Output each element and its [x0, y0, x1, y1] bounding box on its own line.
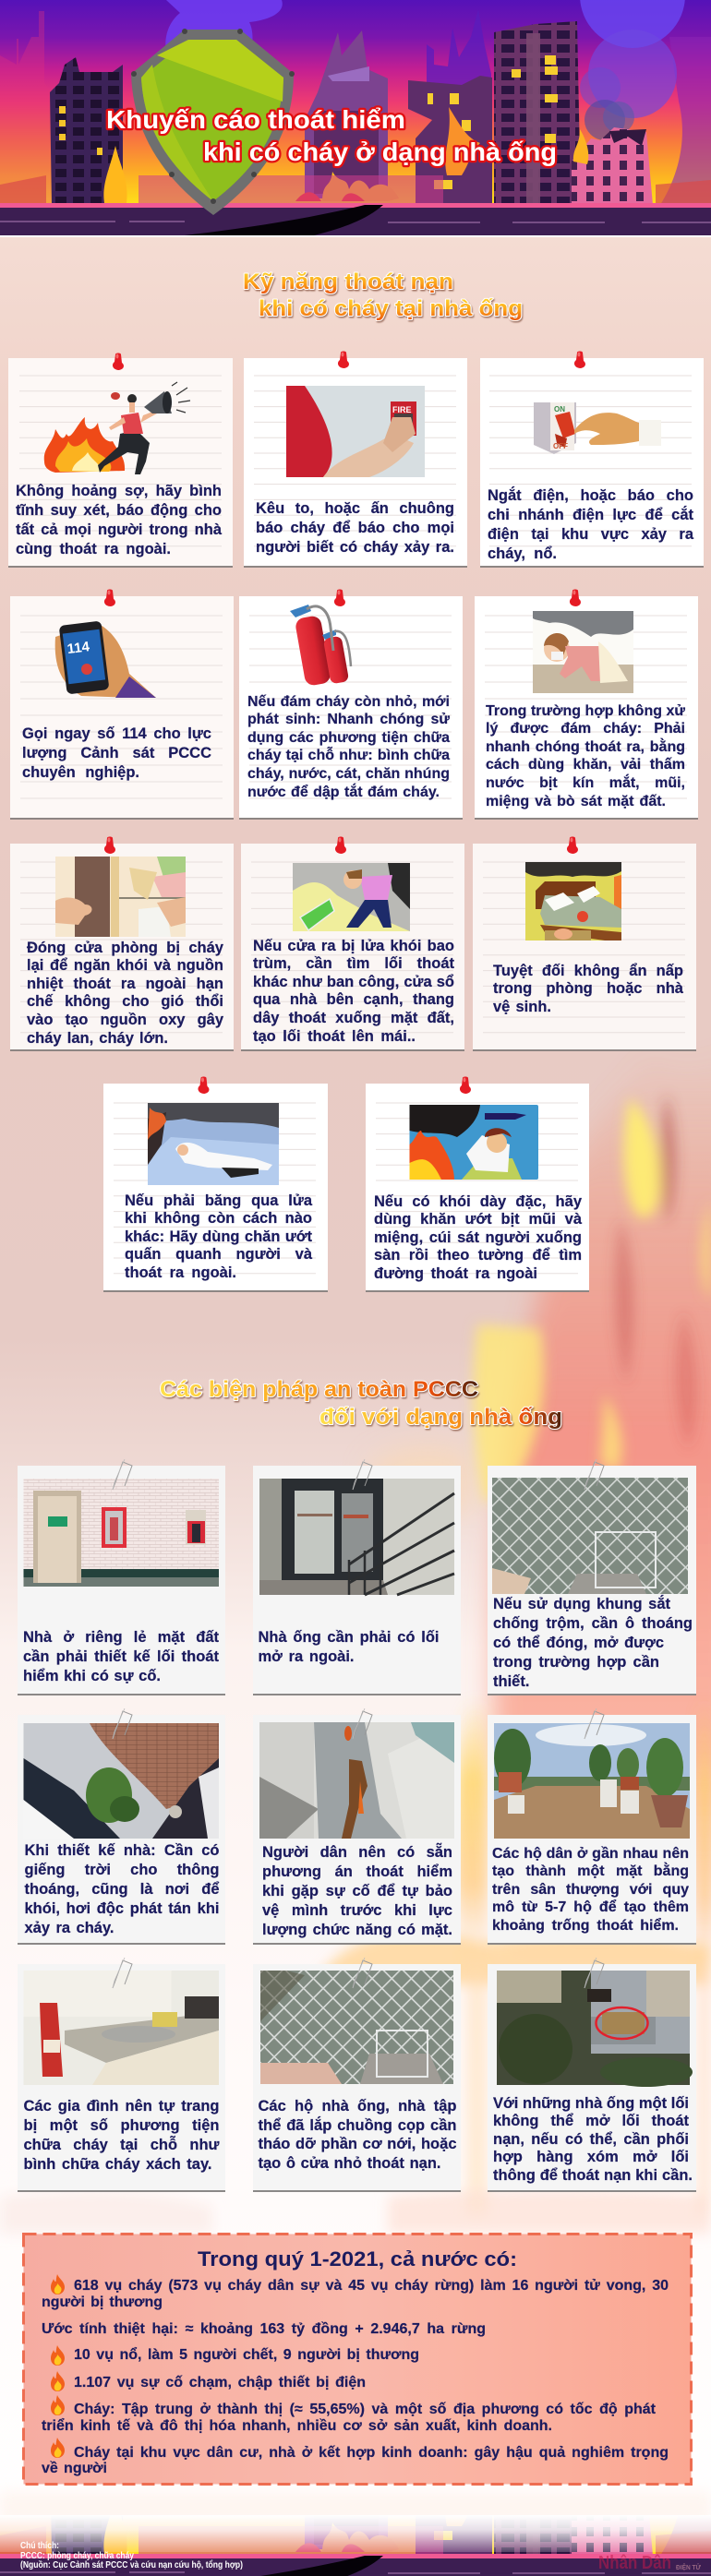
text	[486, 702, 685, 811]
text: phát sinh: Nhanh chóng sử	[247, 712, 450, 727]
icon: pin	[198, 1076, 209, 1094]
stats text: người bị thương	[42, 2294, 163, 2310]
text: quấn quanh người và	[125, 1246, 312, 1263]
photo: pressing fire alarm	[286, 386, 425, 477]
panel: security frames	[488, 1459, 696, 1695]
panel: crawl out	[475, 589, 698, 820]
text: hợp hàng xóm mở lối	[493, 2149, 689, 2165]
text: cháy lan, cháy lớn.	[27, 1030, 168, 1047]
text: điện tại khu vực xảy ra	[488, 526, 693, 543]
text: khi gặp sự cố để tự bảo	[262, 1883, 452, 1899]
text: Nhà ống cần phải có lối	[259, 1629, 440, 1646]
text: cách dùng khăn, vải thấm	[486, 757, 685, 773]
panel: sound the alarm	[244, 351, 467, 568]
text: nước bịt kín mắt, mũi,	[486, 775, 685, 791]
footer notes: PCCC: phòng cháy, chữa cháy	[20, 2551, 134, 2561]
text	[253, 938, 454, 1047]
text: lượng chức năng có mặt.	[262, 1922, 452, 1938]
stats text: Cháy: Tập trung ở thành thị (≈ 55,65%) và một số địa phương có tốc độ phát	[74, 2402, 656, 2417]
text: khói, hơi độc phát tán khi	[24, 1900, 220, 1917]
stats text: Ước tính thiệt hại: ≈ khoảng 163 tỷ đồng + 2.946,7 ha rừng	[42, 2321, 486, 2337]
text: vệ sinh.	[493, 999, 551, 1015]
stats text: Cháy tại khu vực dân cư, nhà ở kết hợp kinh doanh: gây hậu quả nghiêm trọng	[74, 2445, 669, 2461]
text	[24, 1841, 220, 1941]
text	[488, 486, 693, 568]
panel: Q1 2021 statistics	[24, 2234, 691, 2487]
text: không thể mở lối thoát	[493, 2113, 689, 2129]
text: khác: Hãy dùng chăn ướt	[125, 1228, 312, 1245]
text: người biết có cháy xảy ra.	[256, 539, 454, 556]
text	[259, 2097, 456, 2180]
stats text: triển kinh tế và đô thị hóa nhanh, nhiều cơ sở sản xuất, kinh doanh.	[42, 2418, 552, 2434]
text: Các gia đình nên tự trang	[24, 2098, 220, 2115]
text: thiết.	[493, 1673, 529, 1690]
text: Các hộ dân ở gần nhau nên	[492, 1846, 689, 1862]
text	[262, 1843, 452, 1943]
text: cháy, nước, cát, chăn nhúng	[247, 766, 450, 782]
icon: pin	[104, 836, 115, 854]
panel: crossing fire	[103, 1076, 328, 1292]
text: chống trộm, cần ô thoáng	[493, 1615, 693, 1632]
photo: exit door, extinguisher cabinet, phone	[24, 1479, 219, 1587]
icon: flame	[51, 2345, 65, 2366]
text: tháo dỡ phần cơ nới, hoặc	[259, 2136, 456, 2152]
illustration: person following exit sign	[293, 863, 410, 931]
text: trong phòng hoặc nhà	[493, 980, 683, 997]
text: lý được đám cháy: Phải	[486, 721, 685, 737]
icon: flame	[51, 2438, 65, 2458]
text: Nếu phải băng qua lửa	[125, 1192, 312, 1209]
footer notes	[20, 2541, 243, 2570]
panel: call 114	[10, 589, 234, 820]
icon: paperclip	[584, 1708, 604, 1739]
stats text: 1.107 vụ sự cố chạm, chập thiết bị điện	[74, 2375, 366, 2390]
heading: safety measures: đối với dạng nhà ống	[319, 1405, 562, 1430]
text: miệng và bò sát mặt đất.	[486, 794, 666, 809]
panel: shared exit with neighbours	[488, 1958, 696, 2192]
text: hiểm khi có sự cố.	[23, 1668, 161, 1684]
text: thoát ra ngoài.	[125, 1264, 236, 1281]
text	[493, 1595, 693, 1695]
text: Nếu có khói dày đặc, hãy	[374, 1193, 582, 1210]
text: Tuyệt đối không ẩn nấp	[493, 963, 683, 979]
icon: pin	[113, 353, 124, 370]
stats title: Trong quý 1-2021, cả nước có:	[198, 2247, 517, 2270]
icon: paperclip	[584, 1459, 604, 1490]
panel: do not hide	[473, 836, 696, 1051]
text: báo cháy để báo cho mọi	[256, 520, 454, 536]
panel: outward exit	[253, 1459, 461, 1695]
text: chữa cháy tại chỗ như	[24, 2137, 220, 2153]
text	[125, 1192, 312, 1285]
photo: person rappelling a building	[259, 1722, 454, 1839]
icon: hand switching power off	[534, 402, 661, 454]
text	[16, 482, 222, 563]
text: khi không còn cách nào	[125, 1210, 312, 1227]
illustration: closing door and blocking gaps	[55, 857, 186, 937]
icon: paperclip	[584, 1958, 604, 1988]
text: khoảng trống thoát hiểm.	[492, 1918, 679, 1934]
stats text: về người	[42, 2461, 107, 2476]
panel: rooftop	[488, 1708, 696, 1945]
text: tạo lối thoát lên mái..	[253, 1028, 416, 1045]
icon: pin	[338, 351, 349, 368]
panel: close the door	[10, 836, 234, 1051]
text: có thể đóng, mở được	[493, 1635, 664, 1651]
text	[492, 1845, 689, 1941]
text: vệ mình trước khi lực	[262, 1902, 452, 1919]
text: phương án thoát hiểm	[262, 1863, 452, 1880]
text: trên sân thượng với quy	[492, 1882, 689, 1898]
icon: flame	[51, 2395, 65, 2415]
text: Kêu to, hoặc ấn chuông	[256, 500, 454, 517]
text	[256, 499, 454, 560]
text: thoáng, cũng là nơi để	[24, 1881, 220, 1898]
text: giếng trời cho thông	[24, 1862, 220, 1878]
photo: townhouse with circled window	[497, 1971, 693, 2087]
text: nhiệt thoát ra ngoài hạn	[27, 976, 223, 992]
text: đường thoát ra ngoài	[374, 1265, 537, 1282]
text: Người dân nên có sẵn	[262, 1844, 452, 1861]
text: lượng Cảnh sát PCCC	[22, 745, 211, 761]
panel: emergency exit	[18, 1459, 225, 1695]
photo: iron grille with opening	[492, 1478, 688, 1594]
text	[22, 725, 211, 785]
text: chế không cho gió thổi	[27, 993, 223, 1010]
icon: pin	[335, 836, 346, 854]
text: dây thoát xuống mặt đất,	[253, 1010, 454, 1026]
icon: child crawling under smoke	[533, 611, 633, 693]
text	[247, 693, 450, 802]
panel: skylight design	[18, 1708, 225, 1945]
panel: removing grilles	[253, 1958, 461, 2192]
panel: home equipment	[18, 1958, 225, 2192]
panel: small fire extinguishers	[239, 589, 463, 820]
heading: safety measures: Các biện pháp an toàn PCCC	[160, 1377, 478, 1402]
photo: kitchen with extinguisher	[24, 1971, 219, 2085]
text: sàn rồi theo tường để tìm	[374, 1247, 582, 1264]
text: chi nhánh điện lực để cắt	[488, 507, 693, 523]
icon: pin	[334, 589, 345, 606]
photo: rooftop terrace	[494, 1723, 690, 1839]
text: tất cả mọi người trong nhà	[16, 521, 222, 538]
text: nước để dập tắt đám cháy.	[247, 785, 440, 800]
text	[493, 963, 683, 1018]
text: cháy, nổ.	[488, 545, 557, 562]
icon: paperclip	[353, 1958, 372, 1988]
text: Với những nhà ống một lối	[493, 2095, 689, 2112]
text: Khi thiết kế nhà: Cần có	[24, 1842, 220, 1859]
text: trong trường hợp cần	[493, 1654, 659, 1671]
icon: person shouting beside fire	[44, 382, 190, 474]
text: thể đã lắp chuồng cọp cần	[259, 2117, 456, 2134]
text: tạo thành một mặt bằng	[492, 1863, 689, 1879]
text	[374, 1193, 582, 1286]
icon: pin	[567, 836, 578, 854]
text: cần phải thiết kế lối thoát	[23, 1648, 219, 1665]
illustration: crawling under wet blanket	[148, 1103, 279, 1185]
panel: cut the power	[480, 351, 704, 568]
icon: paperclip	[113, 1459, 132, 1490]
illustration: covering nose with wet towel	[410, 1105, 538, 1180]
icon: hand holding phone: 114	[66, 639, 91, 657]
heading: escape skills	[243, 270, 523, 321]
icon: flame	[51, 2371, 65, 2391]
text: nạn, nếu có thể, cần phối	[493, 2131, 689, 2148]
photo: stair and exit door	[259, 1479, 454, 1595]
header banner	[0, 0, 711, 237]
icon: hand holding phone	[55, 620, 156, 698]
heading: escape skills: Kỹ năng thoát nạn	[243, 270, 453, 294]
icon: pin	[570, 589, 581, 606]
icon: flame	[51, 2274, 65, 2294]
panel: find another exit	[241, 836, 464, 1051]
text: Nếu sử dụng khung sắt	[493, 1596, 670, 1612]
stats text: 618 vụ cháy (573 vụ cháy dân sự và 45 vụ cháy rừng) làm 16 người tử vong, 30	[74, 2278, 669, 2294]
text: Nếu cửa ra bị lửa khói bao	[253, 938, 454, 954]
footer notes: Chú thích:	[20, 2541, 59, 2551]
text: vào tạo nguồn oxy gây	[27, 1012, 223, 1028]
footer city strip	[0, 2294, 711, 2576]
text: Nếu đám cháy còn nhỏ, mới	[247, 694, 450, 710]
publisher mark: Nhân Dân	[598, 2553, 671, 2573]
text: Ngắt điện, hoặc báo cho	[488, 487, 693, 504]
icon: paperclip	[353, 1459, 372, 1490]
stats text	[42, 2270, 688, 2487]
photo: grille panel	[260, 1971, 453, 2084]
text: miệng, cúi sát người xuống	[374, 1229, 582, 1246]
text: khác như ban công, cửa sổ	[253, 974, 454, 990]
text	[24, 2097, 220, 2180]
text: mô từ 5-7 hộ để tạo thêm	[492, 1899, 689, 1915]
text: qua nhà bên cạnh, thang	[253, 991, 454, 1008]
text: Trong trường hợp không xử	[486, 703, 685, 719]
panel: escape plan	[253, 1708, 461, 1945]
text: cháy tại chỗ như: bình chữa	[247, 748, 450, 763]
icon: paperclip	[113, 1708, 132, 1739]
text: Nhà ở riêng lẻ mặt đất	[23, 1629, 219, 1646]
text: xảy ra cháy.	[24, 1920, 114, 1936]
text	[259, 1628, 440, 1669]
publisher mark: ĐIỆN TỬ	[676, 2563, 701, 2571]
text	[23, 1628, 219, 1689]
text: tĩnh suy xét, báo động cho	[16, 502, 222, 519]
text: Các hộ nhà ống, nhà tập	[259, 2098, 456, 2115]
text: dùng khăn ướt bịt mũi và	[374, 1211, 582, 1228]
text: mở ra ngoài.	[259, 1648, 355, 1665]
icon: pin	[104, 589, 115, 606]
icon: paperclip	[113, 1958, 132, 1988]
heading: escape skills: khi có cháy tại nhà ống	[259, 296, 523, 321]
text	[493, 2095, 689, 2189]
text: trùm, cần tìm lối thoát	[253, 955, 454, 972]
text: nhanh chóng thoát ra, bằng	[486, 739, 685, 755]
icon: pin	[574, 351, 585, 368]
text: lại để ngăn khói và nguồn	[27, 957, 223, 974]
icon: pin	[460, 1076, 471, 1094]
title	[106, 105, 557, 166]
text: tạo ô cửa nhỏ thoát nạn.	[259, 2155, 441, 2172]
text: dụng các phương tiện chữa	[247, 730, 450, 746]
illustration: child hiding under bed	[525, 862, 621, 941]
icon: hand switching power off: ON	[554, 405, 565, 413]
footer notes: (Nguồn: Cục Cảnh sát PCCC và cứu nạn cứu hộ, tổng hợp)	[20, 2559, 243, 2570]
title: khi có cháy ở dạng nhà ống	[203, 138, 557, 166]
icon: paperclip	[353, 1708, 372, 1739]
icon: shield	[131, 29, 295, 215]
text: cùng thoát ra ngoài.	[16, 541, 171, 557]
text: Gọi ngay số 114 cho lực	[22, 725, 211, 742]
panel: dense smoke	[366, 1076, 589, 1292]
text: bị một số phương tiện	[24, 2117, 220, 2134]
text: chuyên nghiệp.	[22, 764, 139, 781]
icon: fire extinguishers	[290, 605, 351, 687]
text: Không hoảng sợ, hãy bình	[16, 483, 222, 499]
photo: pressing fire alarm: FIRE	[392, 405, 412, 414]
photo: skylight well with plants	[24, 1723, 219, 1839]
text	[27, 940, 223, 1048]
title: Khuyến cáo thoát hiểm	[106, 105, 405, 134]
heading: safety measures	[160, 1377, 562, 1430]
text: thông để thoát nạn khi cần.	[493, 2167, 693, 2184]
icon: hand switching power off: OFF	[553, 442, 568, 450]
text: Đóng cửa phòng bị cháy	[27, 940, 223, 956]
stats text: 10 vụ nổ, làm 5 người chết, 9 người bị thương	[74, 2347, 419, 2363]
text: bình chữa cháy xách tay.	[24, 2156, 212, 2173]
panel: stay calm	[8, 353, 233, 568]
